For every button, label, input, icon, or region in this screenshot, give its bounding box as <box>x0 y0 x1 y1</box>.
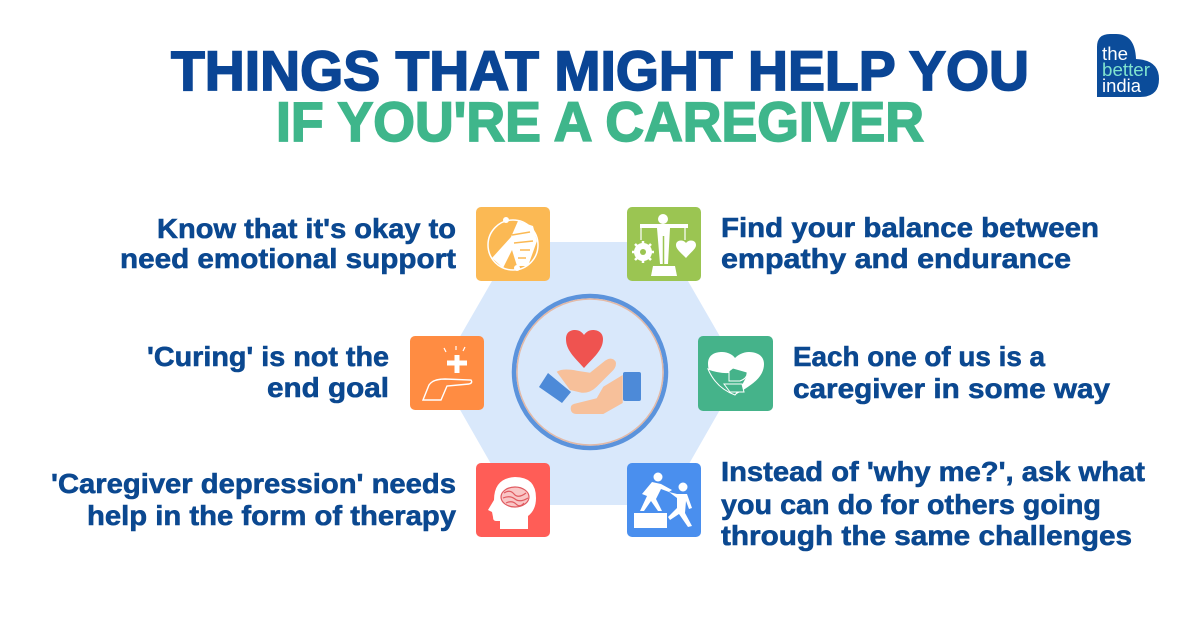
text: emotional support <box>120 213 456 274</box>
title: IF YOU'RE A CAREGIVER <box>276 90 924 153</box>
text: each one: Each one of us is a <box>793 341 1045 372</box>
central circle with caring hands icon <box>514 296 666 448</box>
icon tile: balance scale <box>627 207 701 281</box>
text: curing <box>147 341 389 403</box>
text: emotional support: need emotional support <box>120 243 456 274</box>
text: caregiver depression <box>51 468 456 531</box>
text: emotional support: Know that it's okay to <box>157 213 456 244</box>
text: each one <box>793 341 1110 404</box>
text: why me: Instead of 'why me?', ask what <box>721 456 1145 487</box>
icon tile: heart hug <box>698 336 773 411</box>
text: each one: caregiver in some way <box>793 373 1110 404</box>
logo: the better india <box>1097 34 1159 97</box>
icon tile: helping climb <box>627 463 701 537</box>
text: curing: end goal <box>267 372 389 403</box>
logo: the better india: the <box>1102 44 1128 64</box>
text: why me: through the same challenges <box>721 520 1132 551</box>
logo: the better india: india <box>1102 76 1142 96</box>
text: balance: Find your balance between <box>721 212 1099 243</box>
text: curing: 'Curing' is not the <box>147 341 389 372</box>
icon: heart <box>566 330 603 368</box>
icon tile: emotional support hands <box>476 207 550 281</box>
text: why me: you can do for others going <box>721 489 1101 520</box>
text: caregiver depression: help in the form of therapy <box>87 500 456 531</box>
text: caregiver depression: 'Caregiver depression' needs <box>51 468 456 499</box>
logo: the better india: better <box>1102 60 1150 80</box>
title <box>171 39 1029 153</box>
icon: lower hand <box>571 375 623 414</box>
hexagon background <box>439 242 741 505</box>
icon tile: brain in head <box>476 463 550 537</box>
text: balance <box>721 212 1099 274</box>
title: THINGS THAT MIGHT HELP YOU <box>171 39 1029 102</box>
text: balance: empathy and endurance <box>721 243 1071 274</box>
icon tile: hand with plus <box>410 336 484 410</box>
icon: upper hand <box>557 359 616 393</box>
text: why me <box>721 456 1145 551</box>
